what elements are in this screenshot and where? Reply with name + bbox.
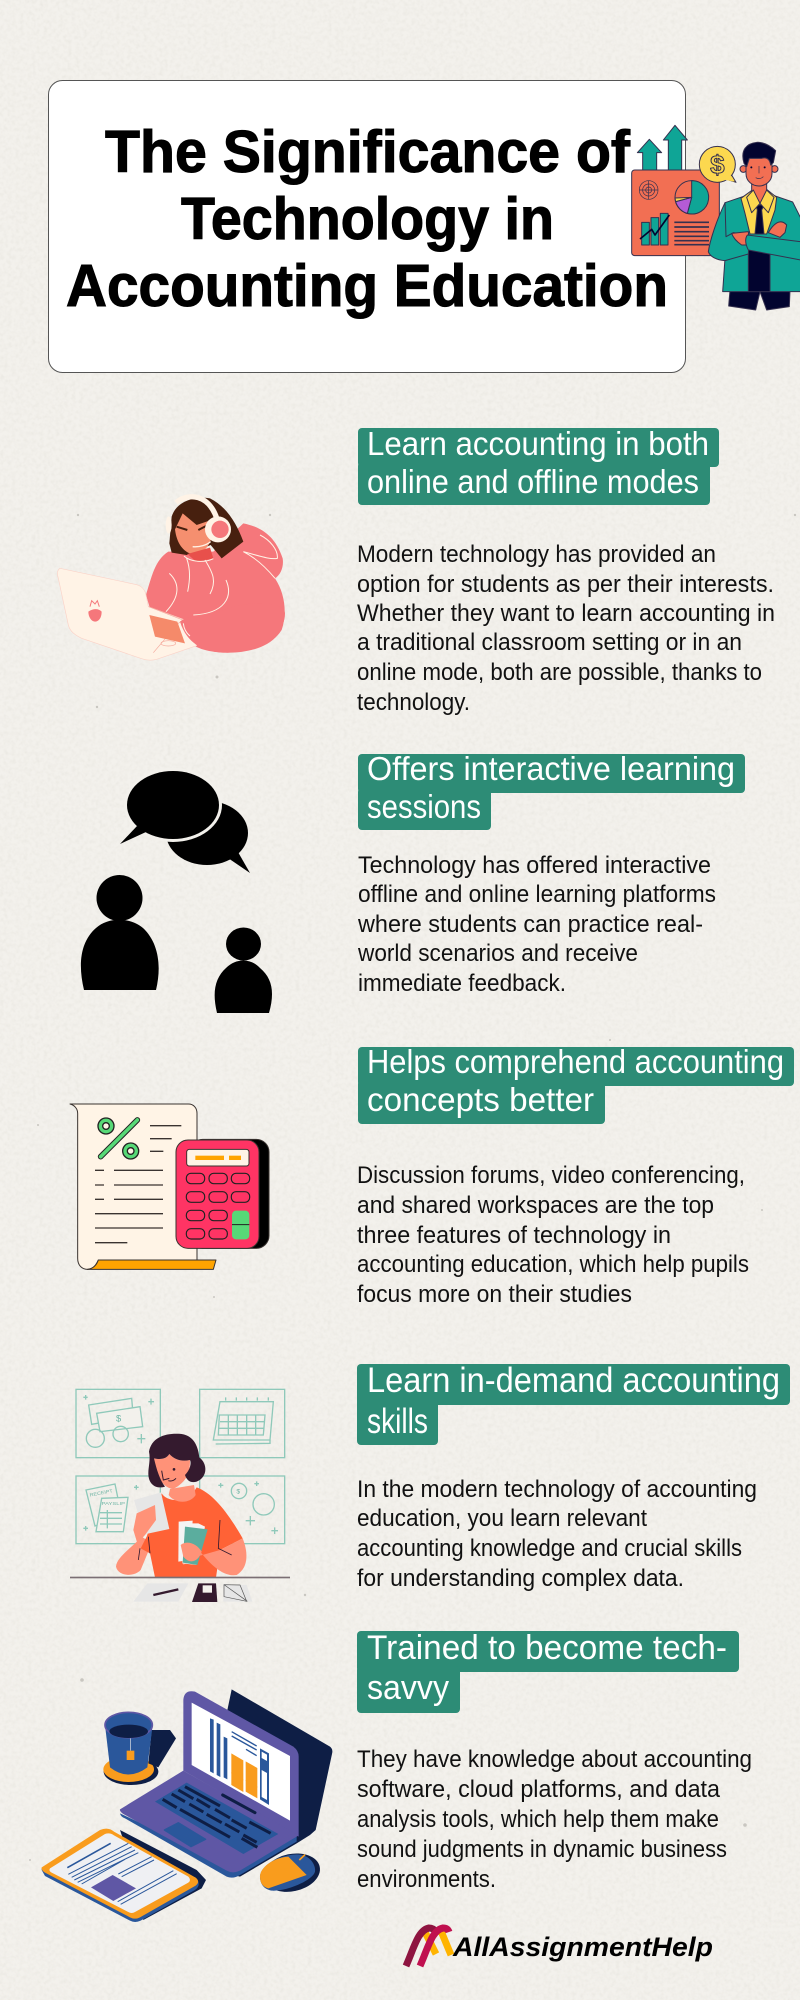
heading tag 5: savvy xyxy=(367,1669,449,1707)
body text 4: In the modern technology of accounting xyxy=(357,1476,757,1503)
icon: woman reviewing receipts and money: PAYSLIP xyxy=(102,1501,125,1506)
body text 2: where students can practice real- xyxy=(357,911,703,938)
section 4: in-demand skills xyxy=(70,1361,790,1602)
logo mark xyxy=(406,1928,451,1966)
section 3: comprehend concepts xyxy=(70,1043,794,1308)
title heading: Accounting Education xyxy=(66,253,668,319)
logo wordmark: AllAssignmentHelp xyxy=(452,1932,713,1962)
section 1: online and offline modes xyxy=(57,425,775,716)
body text 4: accounting knowledge and crucial skills xyxy=(357,1535,742,1562)
body text 4: education, you learn relevant xyxy=(357,1505,647,1532)
body text 5: They have knowledge about accounting xyxy=(357,1746,752,1773)
heading tag 1: Learn accounting in both xyxy=(367,425,709,462)
title panel xyxy=(48,80,800,372)
body text 3: accounting education, which help pupils xyxy=(357,1251,749,1278)
heading tag 2: sessions xyxy=(367,788,481,825)
body text 1: option for students as per their interests. xyxy=(357,571,774,598)
section 2: interactive learning xyxy=(81,750,745,1013)
title heading: The Significance of xyxy=(105,119,630,185)
heading tag 2: Offers interactive learning xyxy=(367,750,735,787)
title card xyxy=(48,80,686,372)
heading tag 1 xyxy=(358,425,719,505)
body text 3: three features of technology in xyxy=(357,1222,671,1249)
icon: woman reviewing receipts and money xyxy=(70,1389,290,1602)
icon: woman reviewing receipts and money: $ xyxy=(116,1413,122,1423)
body text 5: analysis tools, which help them make xyxy=(357,1806,719,1833)
icon: woman reviewing receipts and money: $ xyxy=(236,1488,240,1495)
heading tag 4: skills xyxy=(367,1402,428,1441)
body text 5: software, cloud platforms, and data xyxy=(357,1776,721,1803)
body text 1: Whether they want to learn accounting in xyxy=(357,600,775,627)
heading tag 3: concepts better xyxy=(367,1081,594,1118)
heading tag 5: Trained to become tech- xyxy=(367,1629,727,1667)
icon: businessman with chart board xyxy=(632,125,800,310)
icon: businessman with chart board: $ xyxy=(710,149,725,179)
icon: invoice and calculator xyxy=(70,1104,269,1269)
body text 2 xyxy=(357,852,716,997)
icon: two people with speech bubbles xyxy=(81,768,272,1013)
body text 2: world scenarios and receive xyxy=(357,940,638,967)
logo: AllAssignmentHelp xyxy=(406,1928,713,1966)
body text 5: environments. xyxy=(357,1866,496,1893)
heading tag 3: Helps comprehend accounting xyxy=(367,1043,784,1080)
body text 5 xyxy=(357,1746,752,1893)
title heading xyxy=(66,119,668,319)
body text 1: Modern technology has provided an xyxy=(357,541,716,568)
heading tag 3 xyxy=(358,1043,794,1124)
body text 3: Discussion forums, video conferencing, xyxy=(357,1162,745,1189)
body text 3: focus more on their studies xyxy=(357,1281,632,1308)
body text 5: sound judgments in dynamic business xyxy=(357,1836,727,1863)
body text 1: technology. xyxy=(357,689,470,716)
body text 4: for understanding complex data. xyxy=(357,1565,684,1592)
body text 3 xyxy=(357,1162,749,1308)
body text 3: and shared workspaces are the top xyxy=(357,1192,714,1219)
heading tag 1: online and offline modes xyxy=(367,463,699,500)
icon: laptop, tablet, cup and mouse xyxy=(42,1689,332,1922)
body text 2: Technology has offered interactive xyxy=(358,852,711,879)
heading tag 4: Learn in-demand accounting xyxy=(367,1361,780,1400)
body text 1 xyxy=(357,541,775,716)
icon: woman reviewing receipts and money: RECEIPT xyxy=(89,1488,113,1498)
title heading: Technology in xyxy=(181,186,554,252)
body text 1: a traditional classroom setting or in an xyxy=(357,629,742,656)
body text 1: online mode, both are possible, thanks to xyxy=(357,659,762,686)
section 5: tech-savvy xyxy=(42,1629,752,1922)
body text 2: immediate feedback. xyxy=(358,970,566,997)
body text 2: offline and online learning platforms xyxy=(358,881,716,908)
heading tag 2 xyxy=(358,750,745,830)
body text 4 xyxy=(357,1476,757,1592)
icon: girl with headphones at laptop xyxy=(57,497,285,660)
heading tag 5 xyxy=(357,1629,739,1713)
heading tag 4 xyxy=(357,1361,790,1445)
